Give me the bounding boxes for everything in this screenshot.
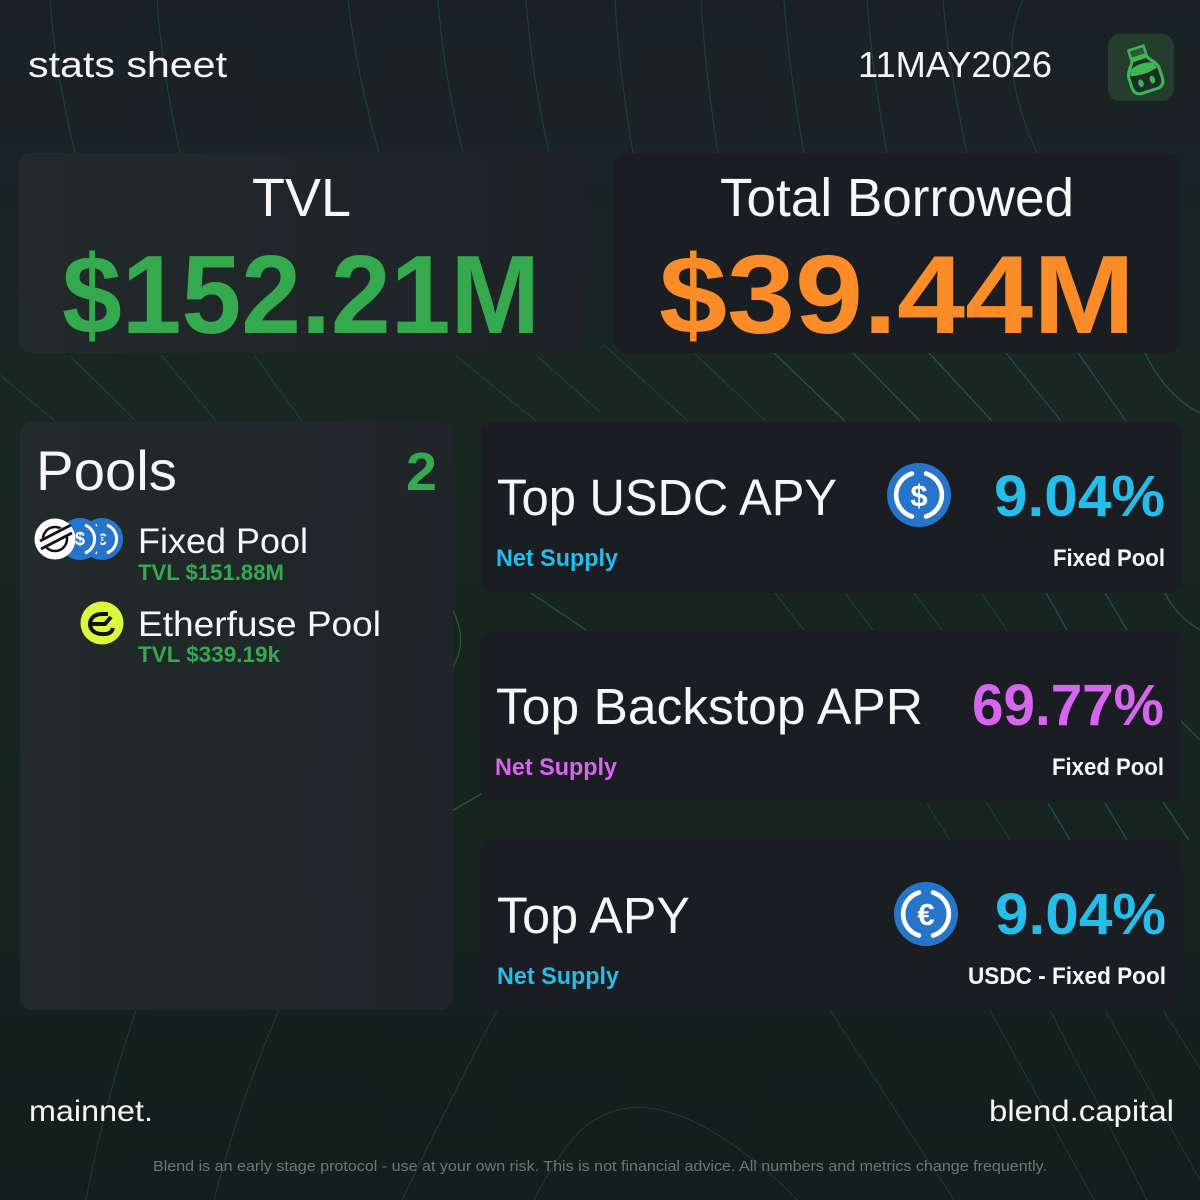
value: 69.77%	[972, 673, 1164, 738]
panel: top backstop APR	[481, 631, 1181, 802]
pool label: USDC - Fixed Pool	[968, 963, 1166, 990]
fixed pool TVL: TVL $151.88M	[138, 560, 284, 585]
header: date: 11MAY2026	[858, 44, 1052, 85]
value: 9.04%	[994, 464, 1165, 529]
disclaimer: Blend is an early stage protocol - use at your own risk. This is not financial advice. All numbers and metrics change frequently.	[153, 1158, 1047, 1175]
pool label: Fixed Pool	[1053, 545, 1165, 572]
net supply label: Net Supply	[495, 754, 618, 781]
total borrowed value: $39.44M	[659, 233, 1135, 357]
net supply label: Net Supply	[497, 963, 620, 990]
pool label: Fixed Pool	[1052, 754, 1164, 781]
panel: total borrowed	[615, 153, 1180, 357]
icon: fixed pool assets	[34, 518, 123, 560]
panel: pools	[20, 422, 453, 1010]
TVL value: $152.21M	[62, 233, 540, 357]
etherfuse pool name: Etherfuse Pool	[138, 605, 381, 644]
panel: TVL	[19, 153, 585, 357]
icon: EURC: €	[917, 897, 935, 932]
icon: USDC	[887, 463, 951, 527]
icon: fixed pool assets: €	[97, 530, 107, 549]
fixed pool name: Fixed Pool	[138, 522, 308, 561]
footer: mainnet: mainnet.	[29, 1095, 153, 1128]
net supply label: Net Supply	[496, 545, 619, 572]
pools heading: Pools	[36, 439, 177, 502]
panel: top APY	[481, 840, 1181, 1010]
total borrowed label: Total Borrowed	[720, 168, 1074, 228]
heading: Top USDC APY	[497, 469, 837, 526]
icon: USDC: $	[910, 478, 928, 513]
icon: fixed pool assets: $	[75, 529, 85, 549]
pools count: 2	[406, 442, 437, 502]
icon: etherfuse	[80, 602, 124, 644]
icon: EURC	[894, 882, 958, 946]
heading: Top APY	[497, 887, 690, 944]
icon: potion bottle logo	[1108, 34, 1174, 101]
TVL label: TVL	[252, 168, 351, 228]
header: stats sheet: stats sheet	[28, 44, 227, 85]
panel: top USDC APY	[481, 422, 1181, 593]
footer: blend.capital: blend.capital	[989, 1095, 1174, 1128]
heading: Top Backstop APR	[496, 678, 923, 735]
etherfuse pool TVL: TVL $339.19k	[138, 642, 281, 667]
value: 9.04%	[995, 882, 1166, 947]
